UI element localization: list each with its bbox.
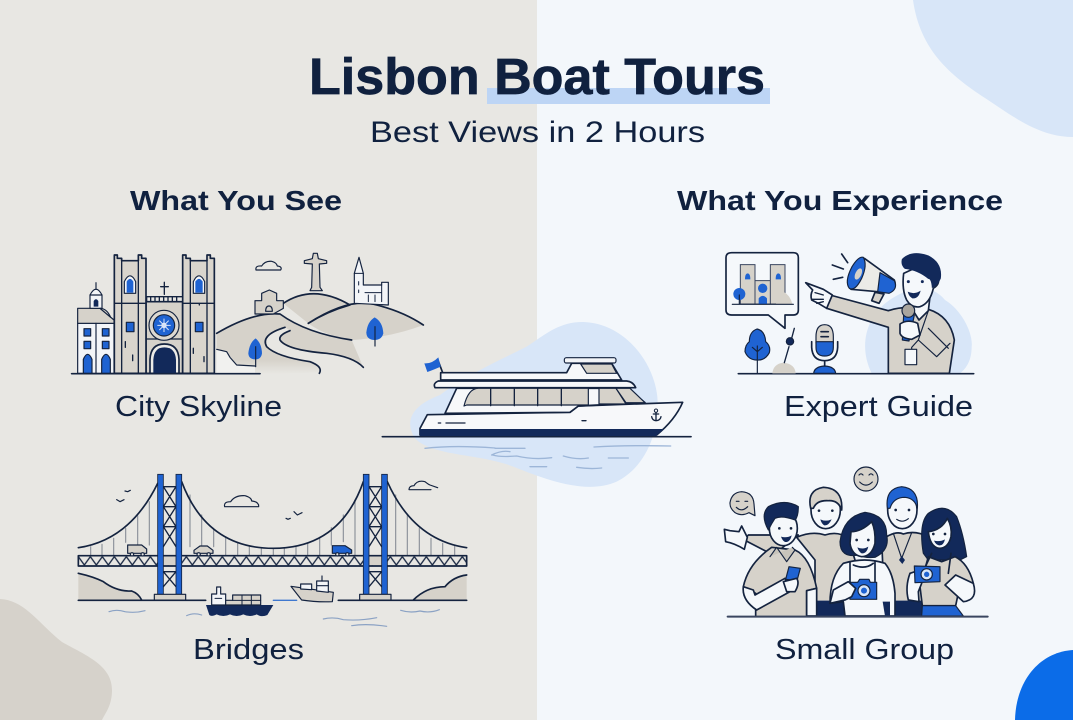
flag (424, 357, 443, 373)
horizon line (382, 434, 691, 439)
person: right woman with camera (907, 508, 975, 616)
bridge deck (78, 556, 467, 566)
Cristo Rei statue (304, 253, 327, 291)
ground line (738, 371, 974, 376)
guide person (806, 254, 954, 373)
person: back left man (724, 487, 855, 617)
cathedral (114, 255, 214, 373)
suspension cables (78, 482, 467, 556)
illustration: small group (724, 467, 988, 617)
person: centre woman with camera (830, 512, 895, 616)
title: Lisbon Boat Tours (309, 48, 765, 105)
label: Bridges: Bridges (193, 634, 304, 666)
passenger ship (291, 576, 333, 602)
towers (154, 474, 391, 600)
illustration: Lisbon bridge (78, 474, 467, 626)
background: left panel (0, 0, 537, 720)
small antenna mound (772, 328, 796, 373)
speech bubble (726, 253, 798, 328)
background: right panel (537, 0, 1073, 720)
cloud (256, 261, 281, 270)
hills (217, 294, 423, 374)
upper deck (434, 358, 636, 388)
label: Small Group: Small Group (775, 634, 954, 666)
label: City Skyline: City Skyline (115, 391, 282, 423)
ground line (728, 614, 988, 620)
cars (128, 545, 352, 556)
person: back right man (882, 487, 928, 617)
blue circle behind guide (865, 288, 972, 373)
ground line (72, 371, 260, 376)
decorative blob: bottom left (0, 599, 112, 720)
illustration: tour boat (382, 322, 691, 487)
megaphone (832, 254, 896, 303)
decorative blob: bottom right (1015, 650, 1073, 720)
illustration: expert guide (726, 253, 974, 374)
heading: What You See: What You See (130, 185, 342, 216)
label: Expert Guide: Expert Guide (784, 391, 973, 423)
container ship (206, 587, 273, 616)
blue water segment (273, 598, 297, 602)
illustration: city skyline (72, 253, 423, 374)
waterline (78, 598, 467, 603)
water ripples (425, 446, 671, 469)
smiley speech bubble (730, 492, 755, 516)
title underline highlight (487, 88, 770, 104)
trees (248, 317, 383, 367)
shores (78, 573, 467, 600)
smiley top (854, 467, 878, 491)
heading: What You Experience: What You Experience (677, 185, 1003, 216)
subtitle: Best Views in 2 Hours (370, 116, 705, 149)
person: left man with phone (743, 502, 817, 617)
clouds and birds (117, 481, 438, 519)
tower and castle (354, 257, 388, 305)
cabin (445, 388, 645, 413)
blue blob behind boat (410, 322, 658, 487)
tree (745, 329, 770, 373)
left building (78, 283, 114, 373)
standing microphone (812, 325, 838, 373)
decorative blob: top right (913, 0, 1073, 137)
water ripples (109, 610, 439, 626)
hull (420, 402, 683, 436)
small palace (255, 290, 283, 314)
